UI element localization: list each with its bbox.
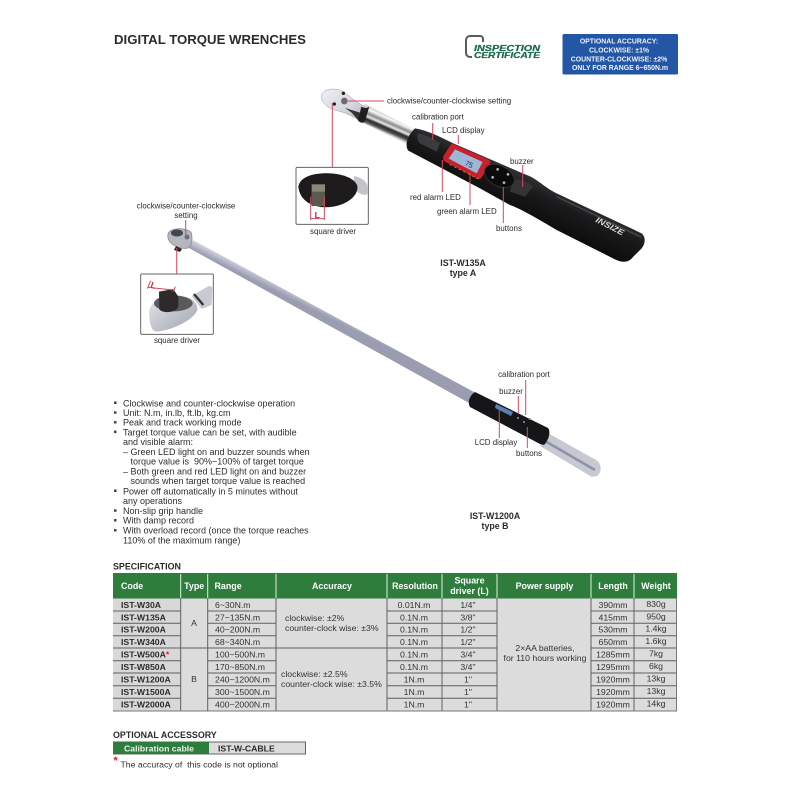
logo: inspection certificate: [466, 36, 541, 60]
callout: optional accuracy: ONLY FOR RANGE 6~650N.m: [572, 65, 668, 72]
feature list: [114, 398, 310, 545]
column: code: IST-W500A*: [121, 649, 170, 659]
column: square driver: [460, 600, 476, 709]
labels: type A: buttons: [496, 224, 522, 233]
column: range: 6~30N.m: [215, 600, 250, 610]
column: accuracy: [281, 613, 382, 689]
feature list: Peak and track working mode: [123, 418, 242, 428]
column: range: 40~200N.m: [215, 625, 260, 635]
chrome neck: [345, 108, 360, 121]
wrench photo: IST-W135A type A: [321, 89, 645, 262]
labels: type B: clockwise/counter-clockwise: [137, 202, 236, 210]
column: weight: 830g: [646, 599, 666, 609]
labels: type A: LCD display: [442, 126, 485, 135]
leader lines: [177, 101, 527, 448]
table header: Range: [214, 581, 242, 591]
logo: inspection certificate: INSPECTION: [474, 43, 541, 53]
labels: type A: clockwise/counter-clockwise setting: [387, 96, 511, 106]
column: code: IST-W135A: [121, 612, 167, 622]
column: length: 530mm: [599, 625, 627, 635]
column: range: 68~340N.m: [215, 637, 260, 647]
labels: type A: red alarm LED: [410, 193, 461, 202]
feature list: and visible alarm:: [123, 437, 193, 447]
accessory row: Calibration cable: [124, 743, 194, 753]
grip highlights: [417, 133, 440, 152]
labels: type B: buzzer: [499, 387, 523, 396]
labels: type B: buttons: [516, 449, 542, 458]
ratchet head: [168, 229, 192, 248]
table header: Type: [184, 581, 204, 591]
column: code: IST-W2000A: [121, 699, 171, 709]
labels: type B: square driver: [154, 336, 200, 345]
column: type: [191, 618, 197, 684]
inset: square driver type B: L: [149, 280, 158, 291]
feature list: – Green LED light on and buzzer sounds when: [123, 447, 310, 457]
column: type: A: [191, 618, 197, 628]
labels: type A: buzzer: [510, 157, 534, 166]
column: square driver: 1/2": [460, 637, 476, 647]
labels: type B: calibration port: [498, 370, 551, 379]
column: code: IST-W340A: [121, 637, 167, 647]
model caption: type A: [440, 258, 486, 278]
column: length: 415mm: [599, 612, 627, 622]
column: square driver: 1": [464, 687, 472, 697]
column: resolution: 1N.m: [404, 699, 424, 709]
long tube: [189, 240, 474, 403]
table header: Accuracy: [312, 581, 352, 591]
column: range: 300~1500N.m: [215, 687, 270, 697]
column: accuracy: clockwise: ±2%: [285, 613, 345, 623]
column: weight: 1.6kg: [645, 636, 667, 646]
model caption: type A: IST-W135A: [440, 258, 486, 268]
feature list: – Both green and red LED light on and buzzer: [123, 466, 306, 476]
column: resolution: 1N.m: [404, 687, 424, 697]
black handle: [469, 392, 549, 445]
feature list: Unit: N.m, in.lb, ft.lb, kg.cm: [123, 408, 231, 418]
column: square driver: 3/4": [460, 649, 476, 659]
table header: driver (L): [450, 586, 489, 596]
column: code: IST-W1500A: [121, 687, 171, 697]
column: range: 240~1200N.m: [215, 674, 270, 684]
feature list: Clockwise and counter-clockwise operation: [123, 398, 295, 408]
table header: Square: [454, 576, 485, 586]
callout: optional accuracy: CLOCKWISE: ±1%: [589, 48, 649, 54]
column: square driver: 1/4": [460, 600, 476, 610]
column: range: 100~500N.m: [215, 649, 265, 659]
column: code: IST-W200A: [121, 625, 167, 635]
column: range: 170~850N.m: [215, 662, 265, 672]
column: length: 1285mm: [596, 649, 630, 659]
column: power supply: 2×AA batteries,: [515, 643, 575, 653]
column: length: 1920mm: [596, 687, 630, 697]
column: range: [215, 600, 270, 709]
LCD strip: [495, 404, 513, 416]
column: resolution: 0.1N.m: [400, 637, 428, 647]
feature list: Power off automatically in 5 minutes without: [123, 486, 298, 496]
accessory row: IST-W-CABLE: [218, 743, 275, 753]
column: square driver: 3/8": [460, 612, 476, 622]
column: square driver: 1": [464, 674, 472, 684]
column: code: IST-W850A: [121, 662, 167, 672]
feature list: Target torque value can be set, with audible: [123, 427, 297, 437]
labels: type B: [137, 202, 551, 458]
column: resolution: [398, 600, 430, 709]
callout: optional accuracy: [562, 34, 678, 74]
title: DIGITAL TORQUE WRENCHES: [114, 32, 306, 47]
table header: Power supply: [516, 581, 573, 591]
collar: [358, 107, 369, 123]
column: length: 1295mm: [596, 662, 630, 672]
column: weight: 7kg: [649, 648, 663, 658]
inset: square driver type B: [141, 274, 213, 334]
column: accuracy: counter-clock wise: ±3%: [285, 623, 379, 633]
red LCD bezel: [443, 143, 490, 179]
column: weight: 950g: [646, 611, 666, 621]
model caption: type B: type B: [482, 521, 508, 531]
feature list: sounds when target torque value is reached: [130, 476, 305, 486]
column: square driver: 1/2": [460, 625, 476, 635]
column: code: IST-W30A: [121, 600, 162, 610]
heading: optional accessory: OPTIONAL ACCESSORY: [113, 730, 217, 740]
feature list: 110% of the maximum range): [123, 535, 240, 545]
wrench photo: IST-W1200A type B: [168, 229, 601, 477]
lower tube: [540, 432, 601, 477]
table header: Resolution: [392, 581, 438, 591]
table header: Weight: [641, 581, 671, 591]
column: range: 400~2000N.m: [215, 699, 270, 709]
column: code: IST-W1200A: [121, 674, 171, 684]
LCD screen: [449, 149, 483, 173]
model caption: type A: type A: [450, 268, 477, 278]
alarm LEDs: [450, 165, 479, 179]
feature list: Non-slip grip handle: [123, 506, 203, 516]
inset: square driver type A: [296, 167, 368, 224]
column: square driver: 3/4": [460, 662, 476, 672]
specification table: [113, 573, 677, 711]
column: resolution: 0.1N.m: [400, 662, 428, 672]
feature list: With damp record: [123, 516, 194, 526]
column: resolution: 0.01N.m: [398, 600, 430, 610]
table header: Length: [598, 581, 628, 591]
column: square driver: 1": [464, 699, 472, 709]
labels: type A: calibration port: [412, 112, 465, 122]
column: weight: 1.4kg: [645, 624, 667, 634]
column: weight: 6kg: [649, 661, 663, 671]
accessory row: [114, 742, 306, 754]
column: resolution: 0.1N.m: [400, 625, 428, 635]
column: length: 390mm: [599, 600, 627, 610]
column: weight: 13kg: [647, 673, 666, 683]
inset: square driver type A: L: [315, 210, 321, 220]
column: code: [121, 600, 171, 709]
model caption: type B: IST-W1200A: [470, 511, 521, 521]
column: resolution: 0.1N.m: [400, 649, 428, 659]
column: length: 650mm: [599, 637, 627, 647]
column: length: [596, 600, 630, 709]
labels: type B: LCD display: [475, 438, 517, 447]
labels: type A: square driver: [310, 227, 356, 236]
labels: type A: green alarm LED: [437, 207, 497, 216]
table body background: [113, 598, 677, 711]
callout: optional accuracy: COUNTER-CLOCKWISE: ±2%: [571, 56, 667, 64]
feature list: With overload record (once the torque reaches: [123, 526, 309, 536]
column: accuracy: counter-clock wise: ±3.5%: [281, 679, 382, 689]
black grip handle: [407, 128, 645, 262]
button panel: [481, 160, 518, 192]
column: power supply: for 110 hours working: [504, 653, 587, 663]
column: power supply: [504, 643, 587, 663]
column: length: 1920mm: [596, 699, 630, 709]
logo: inspection certificate: CERTIFICATE: [474, 50, 540, 60]
column: resolution: 1N.m: [404, 674, 424, 684]
feature list: torque value is 90%~100% of target torque: [130, 457, 304, 467]
steel shaft: [358, 104, 415, 144]
column: length: 1920mm: [596, 674, 630, 684]
column: accuracy: clockwise: ±2.5%: [281, 669, 348, 679]
brand mark: INSIZE: [594, 215, 626, 238]
feature list: any operations: [123, 496, 183, 506]
model caption: type B: [470, 511, 521, 531]
column: range: 27~135N.m: [215, 612, 260, 622]
column: weight: 13kg: [647, 686, 666, 696]
callout: optional accuracy: OPTIONAL ACCURACY:: [580, 38, 658, 46]
table header: [113, 573, 677, 598]
footnote: [114, 755, 278, 770]
heading: specification: SPECIFICATION: [113, 562, 181, 572]
ratchet head: [321, 89, 365, 121]
column: weight: 14kg: [647, 698, 666, 708]
footnote: *: [114, 755, 118, 767]
wrench photo: IST-W135A type A: 75: [464, 159, 475, 170]
table header: Code: [121, 581, 143, 591]
column: weight: [645, 599, 667, 708]
column: type: B: [191, 674, 197, 684]
footnote: The accuracy of this code is not optional: [120, 760, 278, 770]
column: resolution: 0.1N.m: [400, 612, 428, 622]
labels: type B: setting: [174, 211, 198, 220]
labels: type A: [310, 96, 534, 236]
